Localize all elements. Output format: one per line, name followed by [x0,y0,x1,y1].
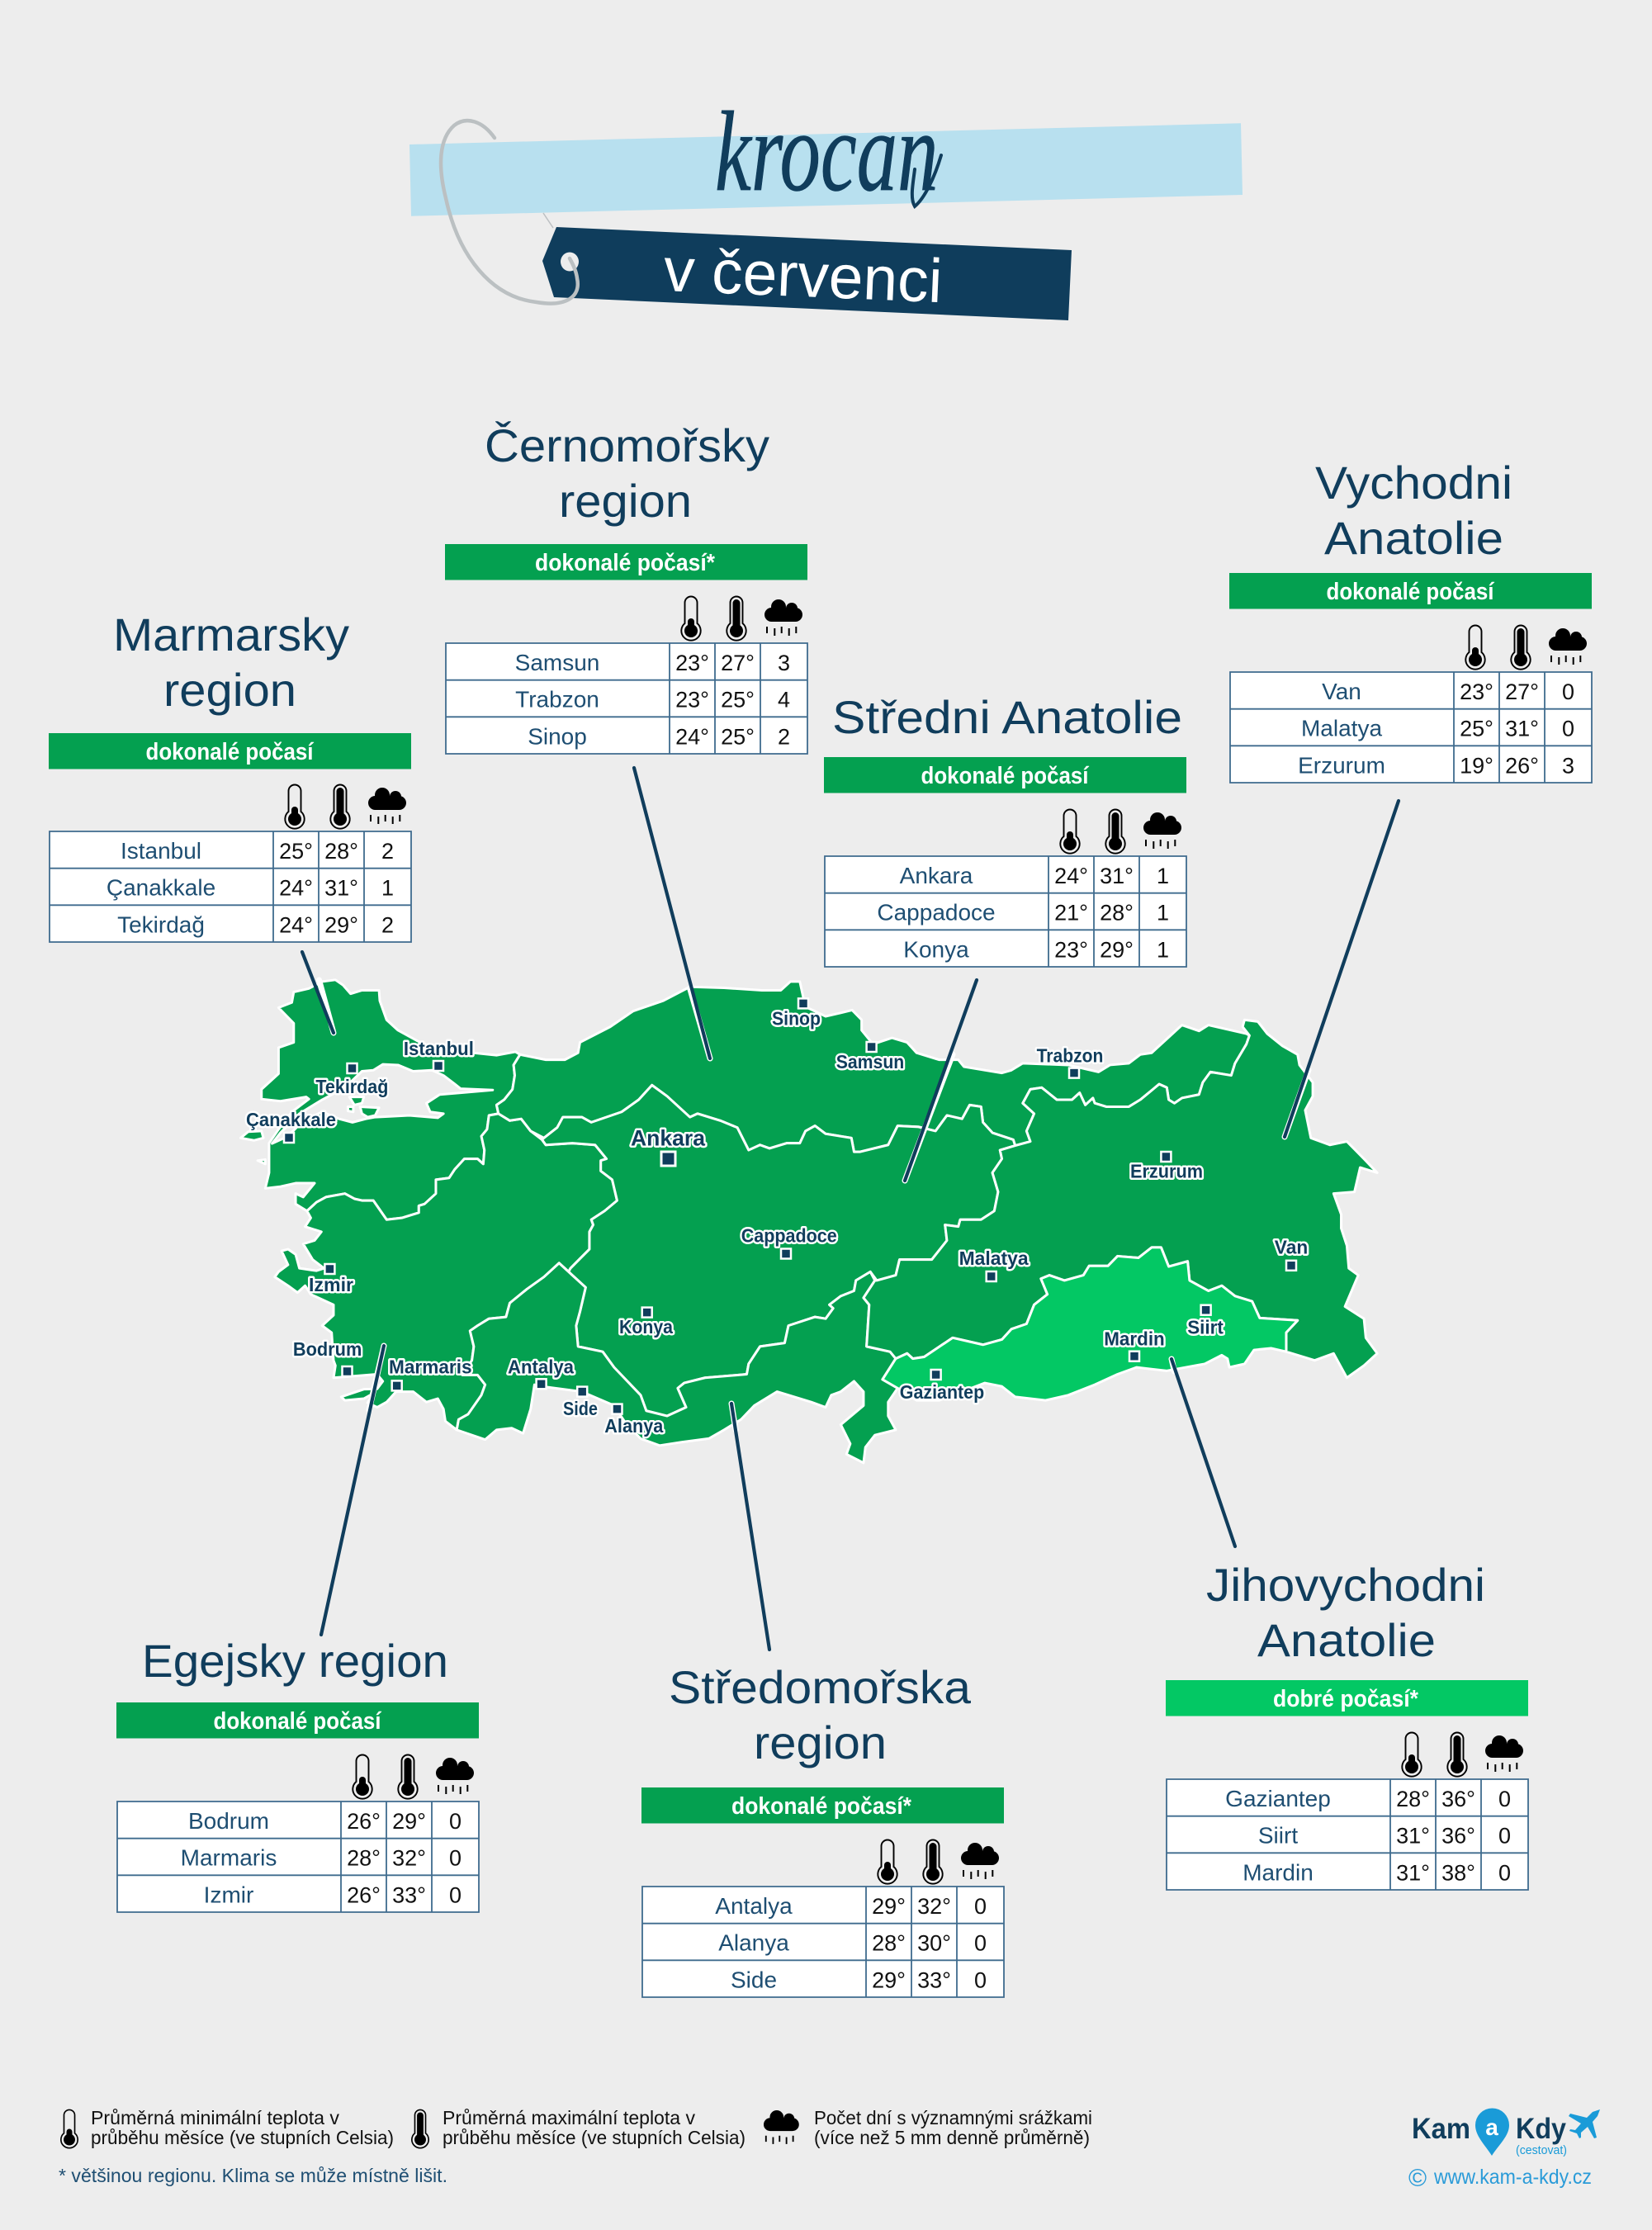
city: Istanbul [404,1038,474,1071]
climate table: 29° [324,912,358,937]
leader line: Marmara [302,952,334,1033]
logo icon: pin [1475,2109,1509,2156]
climate table: 26° [347,1882,381,1907]
city: Samsun [836,1042,904,1072]
climate table [117,1802,479,1912]
leader line: Black Sea [634,768,710,1058]
city: Trabzon [1037,1045,1103,1078]
logo tagline: (cestovat) [1516,2143,1567,2157]
climate table: 0 [1498,1824,1511,1849]
climate table: Sinop [528,723,587,749]
logo icon: pin: a [1485,2114,1498,2140]
climate table: 1 [381,876,394,901]
climate table: 23° [675,688,709,713]
city: Izmir [309,1264,353,1295]
city: Gaziantep: Gaziantep [900,1381,984,1403]
climate table: 0 [449,1846,462,1871]
city: Malatya: Malatya [959,1248,1029,1269]
city: Çanakkale: Çanakkale [246,1109,336,1130]
climate table: 23° [1460,679,1493,704]
panel: Vychodni Anatolie [1229,457,1592,783]
rating bar: dobré počasí* [1273,1686,1419,1712]
city: Bodrum [293,1338,362,1376]
rating bar: dokonalé počasí [1326,579,1494,605]
heading: Anatolie [1257,1614,1436,1666]
heading: Středomořska [669,1661,972,1713]
legend text: rain [814,2107,1092,2148]
city: Alanya: Alanya [604,1415,663,1437]
climate table: Antalya [715,1893,793,1919]
city: Izmir: Izmir [309,1274,353,1295]
climate table: 36° [1441,1787,1475,1811]
heading: region [559,475,692,527]
city: Çanakkale [246,1109,336,1143]
climate table: Erzurum [1298,752,1385,778]
city: Siirt: Siirt [1187,1316,1224,1338]
climate table: 31° [1396,1860,1430,1885]
city: Erzurum: Erzurum [1130,1161,1203,1182]
climate table: 28° [324,839,358,864]
logo word: Kam: Kam [1412,2113,1470,2145]
column icons [681,596,802,641]
column icons [1465,626,1587,670]
climate table: 0 [974,1894,987,1919]
climate table: 2 [778,724,790,749]
rating bar [1229,573,1592,609]
city: Bodrum: Bodrum [293,1338,362,1360]
climate table: 2 [381,839,394,864]
climate table: 23° [1054,937,1088,962]
city: Marmaris: Marmaris [389,1356,472,1378]
climate table: 0 [974,1967,987,1992]
climate table: 0 [974,1931,987,1956]
climate table: 29° [392,1809,426,1834]
climate table: 0 [1498,1787,1511,1811]
leader line: Aegean [321,1346,384,1635]
climate table [825,856,1186,967]
climate table: 25° [721,724,755,749]
climate table: 27° [1505,679,1539,704]
climate table [642,1887,1004,1997]
region: Central Anatolia [542,1085,1015,1416]
city: Trabzon: Trabzon [1037,1045,1103,1067]
logo word: Kdy: Kdy [1516,2113,1566,2145]
heading [669,1661,972,1768]
climate table: 33° [392,1882,426,1907]
rating bar: dokonalé počasí* [731,1793,912,1820]
climate table: 29° [872,1894,906,1919]
legend text: maximum temperature: průběhu měsíce (ve stupních Celsia) [443,2127,746,2148]
heading: region [163,664,296,716]
city: Side [563,1387,598,1419]
region: Marmara [262,980,520,1219]
heading [113,608,349,716]
climate table: 1 [1157,901,1169,926]
climate table [446,643,807,754]
climate table: 38° [1441,1860,1475,1885]
tag hole [561,253,579,271]
legend text: rain: Počet dní s významnými srážkami [814,2107,1092,2128]
leader line: Southeastern Anatolia [1172,1359,1235,1546]
rating bar: dokonalé počasí [145,739,314,765]
panel: Černomořsky region [445,419,807,754]
climate table: Cappadoce [877,900,996,926]
city: Konya: Konya [619,1316,673,1338]
tag shape [542,227,1072,320]
city: Malatya [959,1248,1029,1281]
climate table: 0 [1498,1860,1511,1885]
city: Sinop: Sinop [772,1007,821,1029]
rating bar [116,1702,479,1739]
column icons [285,784,406,829]
climate table: Tekirdağ [117,911,205,937]
city: Tekirdağ: Tekirdağ [315,1076,388,1097]
rating bar [641,1787,1004,1823]
legend [61,2107,1092,2148]
heading: Egejsky region [142,1635,448,1687]
climate table: 26° [347,1809,381,1834]
rating bar [824,757,1186,793]
climate table: 4 [778,688,790,713]
climate table: 26° [1505,753,1539,778]
climate table: Malatya [1301,716,1382,741]
climate table: 25° [721,688,755,713]
climate table: Mardin [1243,1859,1314,1885]
region: Eastern Anatolia [864,1020,1377,1378]
climate table [1167,1779,1528,1890]
heading [1206,1559,1485,1666]
website [1408,2165,1592,2192]
legend icon: maximum temperature [412,2109,428,2148]
climate table: 32° [392,1846,426,1871]
city: Erzurum [1130,1152,1203,1182]
city: Mardin [1104,1328,1165,1361]
leader line: Eastern Anatolia [1285,801,1399,1137]
climate table: 28° [347,1846,381,1871]
rating bar [445,544,807,580]
climate table: Gaziantep [1225,1786,1331,1811]
climate table: 31° [324,876,358,901]
climate table: 3 [778,651,790,675]
city: Alanya [604,1404,663,1437]
climate table: 3 [1562,753,1574,778]
legend text: minimum temperature [91,2107,394,2148]
city: Istanbul: Istanbul [404,1038,474,1059]
city: Antalya: Antalya [508,1356,574,1378]
heading: Vychodni [1315,457,1512,509]
region: Mediterranean [457,1263,897,1463]
climate table: 29° [872,1967,906,1992]
islands [240,1097,379,1164]
climate table: 31° [1505,717,1539,741]
rating bar [49,733,411,769]
climate table: Istanbul [121,838,201,864]
heading: Středni Anatolie [832,691,1182,743]
climate table: 1 [1157,864,1169,888]
website: © [1408,2165,1427,2192]
map of Turkey [240,980,1377,1463]
leader line: Central Anatolia [905,980,977,1181]
climate table [50,831,411,942]
column icons [1402,1732,1523,1777]
climate table: 0 [1562,717,1574,741]
climate table: Alanya [718,1930,789,1956]
logo icon: plane [1569,2109,1600,2138]
climate table: 32° [917,1894,951,1919]
climate table: Bodrum [188,1808,269,1834]
climate table: Siirt [1258,1823,1298,1849]
climate table: 33° [917,1967,951,1992]
legend text: minimum temperature: průběhu měsíce (ve stupních Celsia) [91,2127,394,2148]
region: Black Sea [496,982,1249,1152]
climate table: Konya [903,936,969,962]
city: Tekirdağ [315,1063,388,1097]
climate table: 31° [1396,1824,1430,1849]
Sea of Marmara [272,1064,493,1143]
climate table: Çanakkale [107,875,215,901]
city: Cappadoce [741,1225,837,1258]
climate table: 0 [449,1809,462,1834]
title flourish [912,155,941,206]
city: Ankara: Ankara [631,1126,706,1151]
website: www.kam-a-kdy.cz [1433,2166,1592,2189]
climate table: 19° [1460,753,1493,778]
city: Siirt [1187,1305,1224,1338]
city: Van [1275,1237,1308,1271]
legend icon: minimum temperature [61,2109,78,2148]
region: Southeastern Anatolia [883,1248,1298,1400]
rating bar: dokonalé počasí [213,1708,381,1735]
column icons [1060,809,1181,854]
climate table: 28° [1396,1787,1430,1811]
heading [1315,457,1512,564]
climate table: Trabzon [515,687,599,713]
climate table: 29° [1100,937,1134,962]
heading: Anatolie [1324,512,1503,564]
rating bar [1166,1680,1528,1716]
city: Side: Side [563,1398,598,1419]
city: Samsun: Samsun [836,1051,904,1072]
climate table: 0 [1562,679,1574,704]
climate table: 27° [721,651,755,675]
panel: Středni Anatolie [824,691,1186,967]
city: Van: Van [1275,1237,1308,1258]
legend text: maximum temperature [443,2107,746,2148]
legend icon: rain [764,2110,799,2144]
climate table: Van [1322,679,1361,704]
climate table: Izmir [204,1882,253,1907]
legend text: minimum temperature: Průměrná minimální teplota v [91,2107,340,2128]
panel: Středomořska region [641,1661,1004,1997]
climate table: 31° [1100,864,1134,888]
climate table: 0 [449,1882,462,1907]
map regions [240,980,1377,1463]
footnote: * většinou regionu. Klima se může místně lišit. [59,2165,447,2186]
climate table: 25° [279,839,313,864]
logo: Kam a Kdy [1408,2109,1600,2192]
climate table: 28° [1100,901,1134,926]
panel: Egejsky region [116,1635,479,1912]
climate table: 24° [675,724,709,749]
city: Konya [619,1308,673,1338]
leader line: Mediterranean [731,1404,769,1650]
rating bar: dokonalé počasí [921,763,1089,789]
climate table: 24° [1054,864,1088,888]
climate table: 21° [1054,901,1088,926]
subtitle: v červenci: v červenci [662,234,944,315]
climate table: 28° [872,1931,906,1956]
climate table: Marmaris [181,1845,277,1871]
climate table: 24° [279,876,313,901]
city: Ankara [631,1126,706,1166]
climate table: 24° [279,912,313,937]
climate table: Side [731,1967,777,1992]
heading: Černomořsky [485,419,769,471]
city: Antalya [508,1356,574,1389]
climate table: Ankara [900,863,973,888]
city: Cappadoce: Cappadoce [741,1225,837,1247]
heading: region [754,1716,887,1768]
climate table: 36° [1441,1824,1475,1849]
legend text: maximum temperature: Průměrná maximální teplota v [443,2107,695,2128]
city: Mardin: Mardin [1104,1328,1165,1350]
panel: Jihovychodni Anatolie [1166,1559,1528,1890]
rating bar: dokonalé počasí* [535,550,716,576]
climate table: 25° [1460,717,1493,741]
region: Aegean [275,1114,617,1430]
title block [409,89,1243,320]
climate table [1230,672,1592,783]
title banner [409,123,1243,216]
climate table: 23° [675,651,709,675]
column icons [353,1755,474,1799]
climate table: Samsun [515,650,599,675]
heading [485,419,769,527]
city: Gaziantep [900,1370,984,1403]
climate table: 1 [1157,937,1169,962]
heading: Jihovychodni [1206,1559,1485,1611]
panel: Marmarsky region [49,608,411,942]
column icons [878,1839,999,1884]
city: Sinop [772,998,821,1029]
climate table: 2 [381,912,394,937]
title: krocan: krocan [715,89,938,215]
tag string [441,121,578,304]
legend text: rain: (více než 5 mm denně průměrně) [814,2127,1090,2148]
city: Marmaris [389,1356,472,1390]
climate table: 30° [917,1931,951,1956]
heading: Marmarsky [113,608,349,660]
